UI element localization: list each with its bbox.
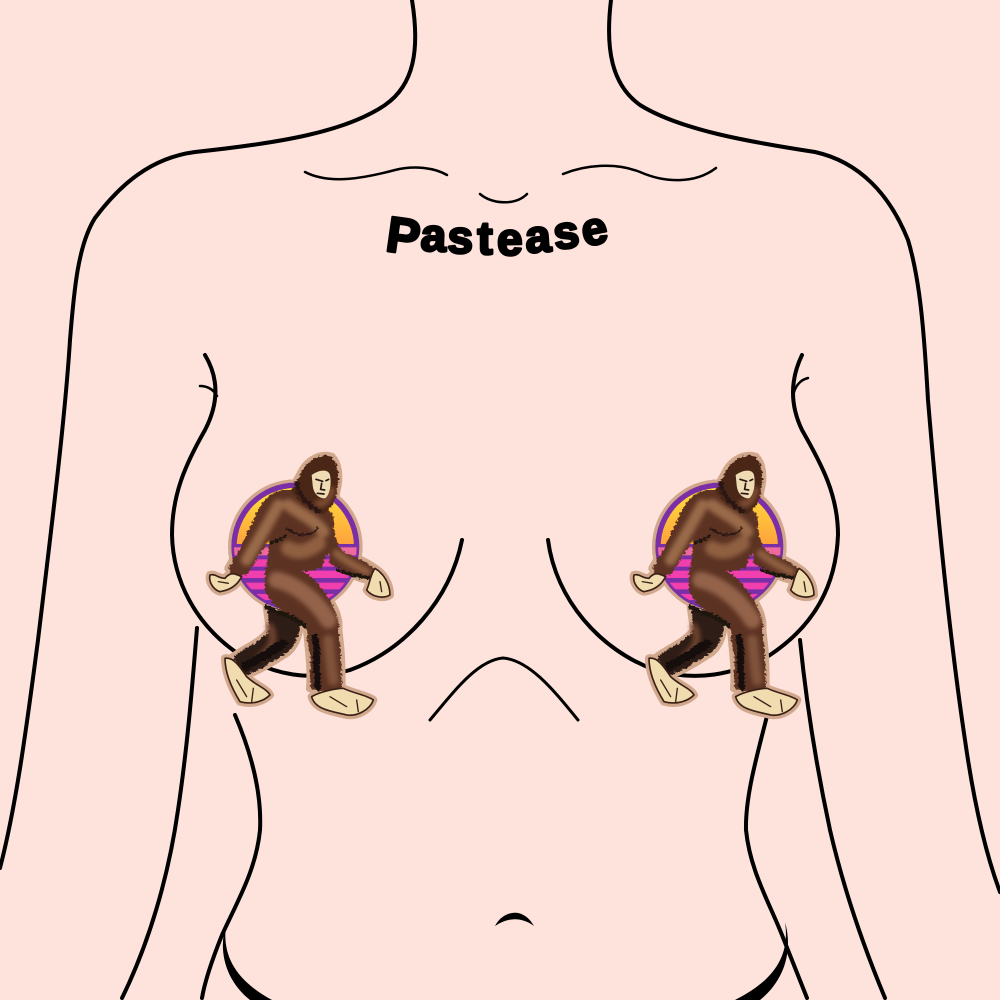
left bigfoot pastie (210, 456, 390, 715)
left inner arm (122, 628, 197, 998)
right underwear edge (735, 922, 788, 1000)
Pastease logo: e (496, 213, 523, 265)
right collarbone (563, 166, 716, 180)
left collarbone (305, 168, 447, 179)
Pastease logo: P (383, 206, 424, 266)
right bigfoot pastie (634, 456, 814, 715)
Pastease logo (383, 200, 611, 266)
left underwear edge (223, 925, 272, 1000)
under-bust curve (430, 658, 578, 720)
neck notch (480, 194, 527, 202)
right inner arm (800, 640, 885, 998)
right bust curve (548, 355, 838, 676)
Pastease logo: a (420, 209, 448, 261)
Pastease logo: s (550, 205, 582, 259)
right bust crease (793, 378, 808, 396)
left bust crease (200, 386, 217, 396)
navel (495, 913, 534, 926)
right waist (746, 695, 807, 998)
Pastease logo: e (576, 200, 611, 256)
right neck and shoulder line (609, 0, 1000, 892)
Pastease logo: t (477, 212, 493, 264)
Pastease logo: a (523, 209, 553, 263)
left waist (202, 715, 260, 998)
left bust curve (172, 355, 462, 676)
left neck and shoulder line (0, 0, 415, 868)
Pastease logo: s (447, 211, 474, 263)
